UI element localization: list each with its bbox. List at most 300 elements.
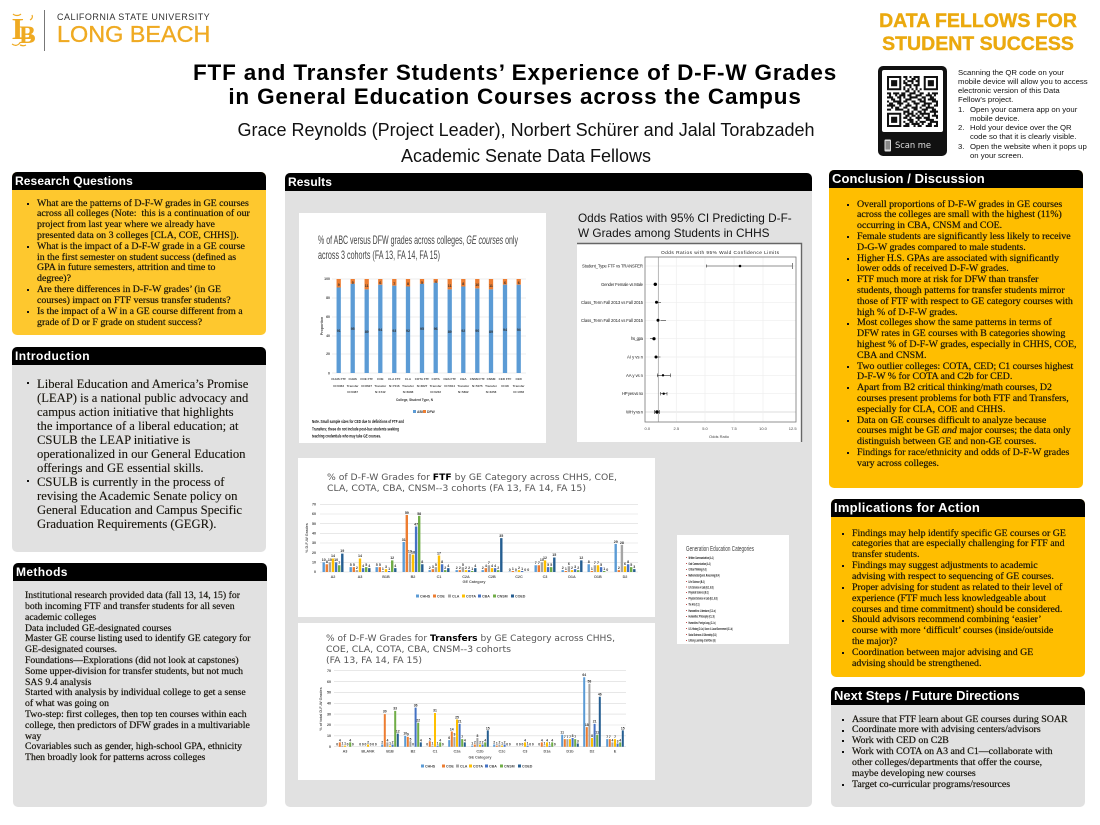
chart: D-F-W grades for transfers by GE category: 9 [407, 733, 409, 737]
chart: percent ABC versus DFW grades: 92 [461, 329, 465, 333]
chart: D-F-W grades for FTF by GE category: 10 [322, 558, 326, 562]
legend: general education categories: Humanities: Philosophy (C.2.b) [688, 615, 715, 619]
chart: D-F-W grades for transfers by GE category: COED [522, 764, 533, 768]
chart: percent ABC versus DFW grades: 6 [379, 281, 381, 285]
heading: introduction: Introduction [15, 349, 90, 363]
chart: D-F-W grades for transfers by GE category: 1 [527, 742, 529, 746]
chart: D-F-W grades for transfers by GE category: 0 [426, 743, 428, 747]
legend: general education categories: Mathematics/Quant. Reasoning (B.4) [688, 574, 720, 578]
chart: D-F-W grades for FTF by GE category: 2 [429, 566, 431, 570]
chart: percent ABC versus DFW grades: 11 [489, 284, 493, 288]
chart: D-F-W grades for transfers by GE category: 4 [386, 738, 388, 742]
chart: D-F-W grades for FTF by GE category: 10 [540, 558, 544, 562]
chart: D-F-W grades for FTF by GE category: 2 [518, 566, 520, 570]
conclusion list: lower odds of received D-F-W grades. [857, 263, 1009, 274]
chart: D-F-W grades for FTF by GE category: 2 [577, 566, 579, 570]
chart: D-F-W grades for transfers by GE category: 0 [336, 743, 338, 747]
chart: D-F-W grades for FTF by GE category: 1 [591, 567, 593, 571]
chart: D-F-W grades for FTF by GE category: 8 [588, 560, 590, 564]
chart: D-F-W grades for FTF by GE category: 6 [624, 562, 626, 566]
chart: D-F-W grades for FTF by GE category: 7 [488, 561, 490, 565]
chart: D-F-W grades for transfers by GE category: 0 [370, 743, 372, 747]
chart: D-F-W grades for FTF by GE category: 58 [417, 512, 421, 516]
implications list: Should advisors recommend combining ‘easier’ [852, 614, 1042, 625]
chart: percent ABC versus DFW grades: % of ABC versus DFW grades across colleges, GE courses only [318, 233, 518, 247]
chart: percent ABC versus DFW grades: 60 [326, 315, 330, 319]
chart: D-F-W grades for FTF by GE category: 59 [405, 511, 409, 515]
chart: D-F-W grades for FTF by GE category: 0 [524, 568, 526, 572]
chart: percent ABC versus DFW grades: N=6988 [403, 390, 414, 394]
next steps list: Coordinate more with advising centers/advisors [852, 724, 1041, 735]
QR instructions: Fellow's project. [958, 94, 1013, 104]
chart: D-F-W grades for transfers by GE category: (FA 13, FA 14, FA 15) [326, 656, 422, 666]
legend: general education categories: The Arts (C.1) [688, 603, 700, 607]
chart: percent ABC versus DFW grades: CHHS FTF [331, 377, 346, 381]
chart: percent ABC versus DFW grades: N=5075 [472, 384, 483, 388]
chart: D-F-W grades for transfers by GE category: 2 [504, 741, 506, 745]
chart: D-F-W grades for transfers by GE category: 2 [498, 741, 500, 745]
chart: D-F-W grades for transfers by GE category: 60 [327, 680, 331, 684]
chart: D-F-W grades for FTF by GE category: 2 [497, 566, 499, 570]
chart: D-F-W grades for transfers by GE category: C2b [476, 750, 484, 754]
chart: D-F-W grades for FTF by GE category: 2 [356, 566, 358, 570]
chart: D-F-W grades for FTF by GE category: 2 [456, 566, 458, 570]
title: in General Education Courses across the Campus [228, 84, 802, 109]
introduction text: (LEAP) is a national public advocacy and [37, 391, 248, 405]
conclusion list: Most colleges show the same patterns in terms of [857, 317, 1052, 328]
QR instructions: electronic version of this Data [958, 86, 1060, 94]
chart: D-F-W grades for FTF by GE category: GE Category [462, 580, 486, 584]
chart: percent ABC versus DFW grades: CBA [460, 377, 467, 381]
research questions list: in the first semester on student success (defined as [37, 252, 236, 263]
chart: D-F-W grades for FTF by GE category: 4 [362, 564, 364, 568]
chart: percent ABC versus DFW grades: 5 [352, 281, 354, 285]
conclusion list: FTF much more at risk for DFW than transfer [857, 274, 1038, 285]
chart: percent ABC versus DFW grades: Transfer [347, 384, 359, 388]
chart: percent ABC versus DFW grades: CED FTF [499, 377, 511, 381]
chart: D-F-W grades for FTF by GE category: 2 [459, 566, 461, 570]
chart: percent ABC versus DFW grades: Note. Small sample sizes for CED due to definitions of FTF and [312, 419, 404, 424]
chart: D-F-W grades for FTF by GE category: C3 [543, 575, 547, 579]
chart: D-F-W grades for FTF by GE category: 7 [338, 561, 340, 565]
chart: D-F-W grades for transfers by GE category: GE Category [468, 756, 492, 760]
chart: percent ABC versus DFW grades: 91 [337, 329, 341, 333]
chart: percent ABC versus DFW grades: 5 [421, 281, 423, 285]
chart: odds ratios forest plot: Gender Female vs Male [601, 282, 644, 287]
chart: percent ABC versus DFW grades: 40 [326, 334, 330, 338]
chart: D-F-W grades for transfers by GE category: A3 [343, 750, 347, 754]
legend: general education categories: Humanities: Literature (C.2.a) [688, 609, 716, 613]
methods text: Foundations—Explorations (did not look at capstones) [25, 655, 239, 666]
chart: D-F-W grades for FTF by GE category: 5 [353, 563, 355, 567]
chart: D-F-W grades for FTF by GE category: 1 [471, 567, 473, 571]
methods text: Covariables such as gender, high-school GPA, ethnicity [25, 741, 242, 752]
chart: D-F-W grades for transfers by GE category: 1 [437, 742, 439, 746]
chart: D-F-W grades for transfers by GE category: 1 [344, 742, 346, 746]
chart: D-F-W grades for FTF by GE category: 1 [521, 567, 523, 571]
heading: conclusion / discussion: Conclusion / Discussion [832, 171, 985, 186]
logo divider [44, 10, 45, 51]
chart: D-F-W grades for transfers by GE category: 2 [482, 741, 484, 745]
chart: percent ABC versus DFW grades: CED [516, 377, 523, 381]
chart: D-F-W grades for transfers by GE category: 0 [372, 743, 374, 747]
chart: D-F-W grades for transfers by GE category: 21 [458, 720, 462, 724]
chart: D-F-W grades for FTF by GE category: 12 [543, 556, 547, 560]
chart: percent ABC versus DFW grades: DFW [427, 410, 436, 414]
chart: D-F-W grades for FTF by GE category: 2 [482, 566, 484, 570]
chart: D-F-W grades for transfers by GE category: 0 [364, 743, 366, 747]
chart: D-F-W grades for FTF by GE category: CLA, COTA, CBA, CNSM--3 cohorts (FA 13, FA 14, FA 15) [327, 484, 586, 494]
chart: D-F-W grades for transfers by GE category: 22 [416, 719, 420, 723]
chart: D-F-W grades for FTF by GE category: C2A [462, 575, 470, 579]
chart: D-F-W grades for transfers by GE category: 0 [516, 743, 518, 747]
methods text: college, then predictors of DFW grades in a multivariable [25, 720, 250, 731]
chart: percent ABC versus DFW grades: Transfer [430, 384, 442, 388]
chart: D-F-W grades for transfers by GE category: 2 [474, 741, 476, 745]
chart: D-F-W grades for transfers by GE category: D2 [590, 750, 594, 754]
chart: D-F-W grades for transfers by GE category: 2 [392, 741, 394, 745]
conclusion list: Findings for race/ethnicity and odds of D-F-W grades [857, 447, 1069, 458]
logo line: campus name: LONG BEACH [57, 21, 210, 47]
chart: D-F-W grades for FTF by GE category: 17 [437, 552, 441, 556]
implications list: Coordination between major advising and GE [852, 647, 1033, 658]
chart: D-F-W grades for transfers by GE category: 4 [551, 738, 553, 742]
chart: D-F-W grades for transfers by GE category: 10 [327, 734, 331, 738]
icon: LB monogram: B [19, 22, 36, 49]
chart: D-F-W grades for FTF by GE category: 1 [603, 567, 605, 571]
QR instructions: mobile device will allow you to access [958, 76, 1088, 86]
chart: D-F-W grades for transfers by GE category: 4 [420, 738, 422, 742]
chart: D-F-W grades for transfers by GE category: 1 [389, 742, 391, 746]
panel: next steps / future directions [831, 687, 1085, 807]
implications list: categories that are especially challenging for FTF and [852, 538, 1065, 549]
program title: Data Fellows for Student Success: STUDENT SUCCESS [882, 32, 1074, 54]
conclusion list: occurring in CBA, CNSM and COE. [857, 220, 1002, 231]
next steps list: Work with CED on C2B [852, 735, 949, 746]
chart: D-F-W grades for FTF by GE category: 0 [314, 570, 316, 574]
next steps list: Work with COTA on A3 and C1—collaborate with [852, 746, 1053, 757]
chart: D-F-W grades for FTF by GE category: 2 [465, 566, 467, 570]
chart: D-F-W grades for FTF by GE category: % of D-F-W Grades for FTF by GE Category across CHHS, COE, [327, 473, 617, 483]
chart: percent ABC versus DFW grades: Transfer [402, 384, 415, 388]
chart: percent ABC versus DFW grades: 89 [448, 330, 452, 334]
chart: D-F-W grades for FTF by GE category: 47 [414, 522, 418, 526]
implications list: Findings may help identify specific GE courses or GE [852, 528, 1066, 539]
chart: percent ABC versus DFW grades: 89 [489, 330, 493, 334]
chart: D-F-W grades for FTF by GE category: 18 [411, 550, 415, 554]
chart: D-F-W grades for transfers by GE category: COTA [473, 764, 483, 768]
chart: percent ABC versus DFW grades: 100 [324, 277, 330, 281]
chart: percent ABC versus DFW grades: 94 [517, 328, 521, 332]
research questions list: grade of D or F grade on student success? [37, 317, 202, 328]
chart: D-F-W grades for FTF by GE category: CLA [452, 594, 460, 598]
chart: D-F-W grades for transfers by GE category: 31 [433, 709, 437, 713]
chart: D-F-W grades for FTF by GE category: 3 [633, 565, 635, 569]
chart: D-F-W grades for transfers by GE category: 4 [439, 738, 441, 742]
chart: percent ABC versus DFW grades: 90 [475, 329, 479, 333]
chart: D-F-W grades for FTF by GE category: 5 [547, 563, 549, 567]
panel: results [285, 173, 812, 807]
chart: D-F-W grades for transfers by GE category: % of D-F-W Grades for Transfers by GE Category across CHHS, [326, 634, 615, 644]
chart: D-F-W grades for FTF by GE category: 8 [627, 560, 629, 564]
QR instructions: 3. [958, 142, 964, 150]
chart: D-F-W grades for transfers by GE category: CBA [489, 764, 497, 768]
chart: D-F-W grades for FTF by GE category: 7 [535, 561, 537, 565]
chart: D-F-W grades for transfers by GE category: 0 [352, 743, 354, 747]
title [193, 60, 837, 109]
chart: D-F-W grades for FTF by GE category: C2C [515, 575, 523, 579]
chart: percent ABC versus DFW grades: Transfer [513, 384, 525, 388]
chart: D-F-W grades for FTF by GE category: 1 [382, 567, 384, 571]
chart: D-F-W grades for FTF by GE category: D1A [568, 575, 576, 579]
research questions list: degree)? [37, 273, 71, 284]
QR instructions: mobile device. [970, 114, 1020, 122]
chart: D-F-W grades for FTF by GE category: % D-F-W Grades [305, 523, 309, 553]
conclusion list: Two outlier colleges: COTA, CED; C1 courses highest [857, 361, 1073, 372]
conclusion list: high % of D-F-W grades. [857, 307, 957, 318]
chart: D-F-W grades for transfers by GE category: 58 [588, 680, 591, 684]
methods text: Data included GE-designated courses [25, 623, 171, 634]
research questions list [27, 198, 250, 328]
chart: odds ratios forest plot: 10.0 [759, 426, 768, 431]
chart: D-F-W grades for transfers by GE category: D1b [566, 750, 574, 754]
heading: introduction [12, 347, 266, 365]
introduction text: the importance of a liberal education; at [37, 419, 238, 433]
next steps list [842, 714, 1068, 790]
chart: D-F-W grades for FTF by GE category: 29 [614, 540, 618, 544]
implications list: advising should be strengthened. [852, 658, 981, 669]
chart: percent ABC versus DFW grades: CBA FTF [443, 377, 456, 381]
chart: D-F-W grades for transfers by GE category: 9 [453, 733, 455, 737]
chart heading: odds ratios: Odds Ratios with 95% CI Predicting D-F- [578, 211, 792, 225]
QR instructions [958, 68, 1088, 160]
chart: D-F-W grades for transfers by GE category: 7 [609, 735, 611, 739]
chart: percent ABC versus DFW grades: Transfer [485, 384, 498, 388]
heading: results [285, 173, 812, 191]
chart: D-F-W grades for FTF by GE category: 4 [394, 564, 396, 568]
chart: D-F-W grades for transfers by GE category: 64 [582, 673, 586, 677]
chart: D-F-W grades for transfers by GE category: C2c [499, 750, 505, 754]
chart: D-F-W grades for FTF by GE category: 12 [390, 556, 394, 560]
introduction text: CSULB the LEAP initiative is [37, 433, 190, 447]
chart: D-F-W grades for transfers by GE category: 1 [501, 742, 503, 746]
chart: D-F-W grades for FTF by GE category: C2B [488, 575, 496, 579]
chart: percent ABC versus DFW grades: COE FTF [360, 377, 373, 381]
logo line: university name: CALIFORNIA STATE UNIVERSITY [57, 12, 210, 22]
chart: D-F-W grades for transfers by GE category: 0 [532, 743, 534, 747]
conclusion list: highest % of D-F-W grades, especially in CHHS, COE, [857, 339, 1077, 350]
chart: odds ratios forest plot: 5.0 [702, 426, 709, 431]
legend: general education categories: U.S. History (D.1.a) / Amer. & Local Government (D.1.b) [688, 627, 733, 631]
chart: D-F-W grades for FTF by GE category: 19 [408, 550, 412, 554]
chart: D-F-W grades for transfers by GE category: CNSM [504, 764, 515, 768]
chart: D-F-W grades for FTF by GE category: 50 [312, 522, 316, 526]
chart: D-F-W grades for transfers by GE category: 0 [442, 743, 444, 747]
chart: D-F-W grades for transfers by GE category: 10 [403, 732, 407, 736]
chart: D-F-W grades for FTF by GE category: 7 [538, 561, 540, 565]
methods text: Institutional research provided data (fall 13, 14, 15) for [25, 590, 240, 601]
chart: percent ABC versus DFW grades: 93 [392, 329, 396, 333]
chart: D-F-W grades for transfers by GE category: 11 [595, 731, 599, 735]
chart: D-F-W grades for FTF by GE category: 4 [494, 564, 496, 568]
chart: odds ratios forest plot: AI y vs n [627, 354, 644, 360]
chart: D-F-W grades for FTF by GE category: 2 [618, 566, 620, 570]
chart: odds ratios forest plot: AA y vs n [626, 373, 644, 378]
chart: D-F-W grades for transfers by GE category: 7 [566, 735, 568, 739]
chart: percent ABC versus DFW grades: CHHS [348, 377, 357, 381]
heading: implications for action [831, 499, 1085, 517]
program title: Data Fellows for Student Success: DATA FELLOWS FOR [879, 10, 1077, 32]
methods text: SAS 9.4 analysis [25, 677, 91, 688]
methods text: Started with analysis by individual college to get a sense [25, 687, 246, 698]
chart: odds ratios forest plot: 2.5 [674, 426, 680, 431]
chart: D-F-W grades for FTF by GE category: 1 [512, 567, 514, 571]
chart: percent ABC versus DFW grades: College, Student Type, N [396, 397, 433, 402]
methods text: Some upper-division for transfer students, but not much [25, 666, 243, 677]
chart: D-F-W grades for FTF by GE category: 10 [312, 560, 316, 564]
chart: D-F-W grades for FTF by GE category: 1 [388, 567, 390, 571]
legend: general education categories: Life Science w/ Lab (B.2, B.3) [688, 585, 714, 589]
chart: D-F-W grades for transfers by GE category: 4 [541, 738, 543, 742]
heading: results: Results [288, 175, 332, 189]
chart: D-F-W grades for transfers by GE category: 4 [546, 738, 548, 742]
chart: percent ABC versus DFW grades: N=5814 [444, 384, 455, 388]
chart: percent ABC versus DFW grades: Transfer [457, 384, 470, 388]
implications list: course with more ‘difficult’ courses (inside/outside [852, 625, 1053, 636]
next steps list: maybe developing new courses [852, 768, 976, 779]
heading: next steps: Next Steps / Future Directions [834, 688, 1020, 703]
research questions list: GPA in future semesters, attrition and time to [37, 262, 215, 273]
chart: D-F-W grades for transfers by GE category: 1 [471, 742, 473, 746]
authors: Grace Reynolds (Project Leader), Norbert Schürer and Jalal Torabzadeh [238, 120, 814, 140]
introduction text: Graduation Requirements (GEGR). [37, 517, 216, 531]
methods text [24, 590, 251, 763]
chart: D-F-W grades for FTF by GE category: D1B [594, 575, 602, 579]
heading: conclusion / discussion [829, 170, 1083, 188]
research questions list: presented data on 3 colleges [CLA, COE, CHHS]). [37, 230, 239, 241]
panel: introduction [12, 347, 266, 552]
chart: D-F-W grades for FTF by GE category: 5 [435, 563, 437, 567]
chart: D-F-W grades for transfers by GE category: 25 [455, 716, 459, 720]
chart: D-F-W grades for transfers by GE category: COE, CLA, COTA, CBA, CNSM--3 cohorts [326, 645, 511, 655]
program title: Data Fellows for Student Success [879, 10, 1077, 54]
chart: percent ABC versus DFW grades: 9 [338, 283, 340, 287]
chart: D-F-W grades for FTF by GE category: 8 [326, 560, 328, 564]
heading: research questions [12, 172, 266, 190]
chart: D-F-W grades for FTF by GE category: 5 [365, 563, 367, 567]
QR instructions: 2. [958, 122, 964, 132]
chart: D-F-W grades for transfers by GE category: 6 [448, 736, 450, 740]
chart: percent ABC versus DFW grades: 92 [406, 329, 410, 333]
chart: D-F-W grades for FTF by GE category: 15 [552, 553, 556, 557]
chart: odds ratios forest plot: Odds Ratios with 95% Wald Confidence Limits [661, 250, 780, 256]
chart: D-F-W grades for transfers by GE category: 50 [327, 691, 331, 695]
chart: D-F-W grades for transfers by GE category: 11 [560, 731, 564, 735]
methods text: Master GE course listing used to identify GE category for [25, 633, 251, 644]
research questions list: project from last year where we already have [37, 219, 215, 230]
chart: D-F-W grades for FTF by GE category: 7 [594, 561, 596, 565]
panel: methods [13, 563, 267, 807]
implications list: Findings may suggest adjustments to academic [852, 560, 1038, 571]
methods text: of what was going on [25, 698, 109, 709]
chart: D-F-W grades for transfers by GE category: 0 [359, 743, 361, 747]
conclusion list: Higher H.S. GPAs are associated with significantly [857, 253, 1059, 264]
QR code card: Scan me [895, 140, 931, 150]
chart: D-F-W grades for transfers by GE category: 4 [611, 738, 613, 742]
chart: D-F-W grades for FTF by GE category: 5 [350, 563, 352, 567]
icon: LB monogram: L [12, 11, 33, 46]
chart: D-F-W grades for transfers by GE category: 2 [367, 741, 369, 745]
legend: general education categories: Humanities: Foreign Lang. (C.2.c) [688, 621, 716, 625]
chart: D-F-W grades for transfers by GE category: 4 [484, 738, 486, 742]
chart: D-F-W grades for transfers by GE category: 15 [486, 726, 490, 730]
chart: percent ABC versus DFW grades: 6 [504, 281, 506, 285]
chart: odds ratios forest plot: 0.0 [645, 426, 651, 431]
chart: D-F-W grades for transfers by GE category: 7 [564, 735, 566, 739]
conclusion list: Data on GE courses difficult to analyze because [857, 415, 1046, 426]
chart: D-F-W grades for transfers by GE category: 18 [585, 723, 589, 727]
chart: odds ratios forest plot: Odds Ratio [709, 434, 730, 439]
chart: D-F-W grades for FTF by GE category: 10 [328, 558, 332, 562]
chart: percent ABC versus DFW grades: CNSM [487, 377, 496, 381]
chart: D-F-W grades for transfers by GE category: 4 [524, 738, 526, 742]
chart: D-F-W grades for FTF by GE category: 14 [331, 554, 335, 558]
chart: D-F-W grades for transfers by GE category: B1B [386, 750, 394, 754]
chart: D-F-W grades for transfers by GE category: 2 [493, 741, 495, 745]
chart: D-F-W grades for transfers by GE category: 4 [339, 738, 341, 742]
chart: D-F-W grades for transfers by GE category: 0 [554, 743, 556, 747]
chart: percent ABC versus DFW grades: teaching credentials who may take GE courses. [312, 434, 381, 438]
chart: D-F-W grades for FTF by GE category: 31 [402, 538, 406, 542]
chart: percent ABC versus DFW grades: N=3827 [417, 384, 428, 388]
chart: D-F-W grades for transfers by GE category: E [614, 750, 617, 754]
implications list: experience (FTF much less knowledgeable about [852, 593, 1046, 604]
methods text: both incoming FTF and transfer students for all seven [25, 601, 235, 612]
conclusion list: across the colleges are small with the highest (11%) [857, 209, 1062, 220]
chart: odds ratios forest plot: Student_Type FTF vs TRANSFER [582, 264, 643, 268]
chart: percent ABC versus DFW grades: CNSM FTF [470, 377, 485, 381]
chart: D-F-W grades for transfers by GE category: 4 [464, 738, 466, 742]
panel: research questions [12, 172, 266, 335]
chart: D-F-W grades for FTF by GE category: 3 [574, 565, 576, 569]
chart: D-F-W grades for transfers by GE category: 4 [349, 738, 351, 742]
introduction text: campus action initiative that highlights [37, 405, 234, 419]
chart: percent ABC versus DFW grades: N=98 [501, 384, 509, 388]
heading: research questions: Research Questions [15, 174, 133, 188]
chart: D-F-W grades for FTF by GE category: 1 [565, 567, 567, 571]
chart: D-F-W grades for transfers by GE category: 0 [362, 743, 364, 747]
chart: percent ABC versus DFW grades: 10 [475, 283, 479, 287]
chart: percent ABC versus DFW grades: COE [377, 377, 384, 381]
chart: D-F-W grades for transfers by GE category: 1 [341, 742, 343, 746]
implications list [842, 528, 1066, 669]
chart: percent ABC versus DFW grades: 0 [328, 372, 330, 376]
chart: percent ABC versus DFW grades: N=6363 [333, 384, 344, 388]
chart: D-F-W grades for transfers by GE category: 1 [549, 742, 551, 746]
chart: percent ABC versus DFW grades: 80 [326, 296, 330, 300]
heading: next steps [831, 687, 1085, 705]
conclusion list: D-G-W grades compared to male students. [857, 242, 1026, 253]
chart: D-F-W grades for transfers by GE category: 20 [327, 723, 331, 727]
introduction text: General Education and Campus Specific [37, 503, 242, 517]
chart: D-F-W grades for FTF by GE category: CHHS [420, 594, 431, 598]
legend: general education categories: Generation Education Categories [686, 544, 754, 553]
chart: D-F-W grades for transfers by GE category: C2a [454, 750, 461, 754]
chart: odds ratios forest plot: Class_Term Fall 2014 vs Fall 2015 [581, 318, 644, 323]
chart: D-F-W grades for transfers by GE category: 0 [375, 743, 377, 747]
chart: D-F-W grades for transfers by GE category: 14 [450, 728, 454, 732]
QR code card [878, 66, 947, 156]
